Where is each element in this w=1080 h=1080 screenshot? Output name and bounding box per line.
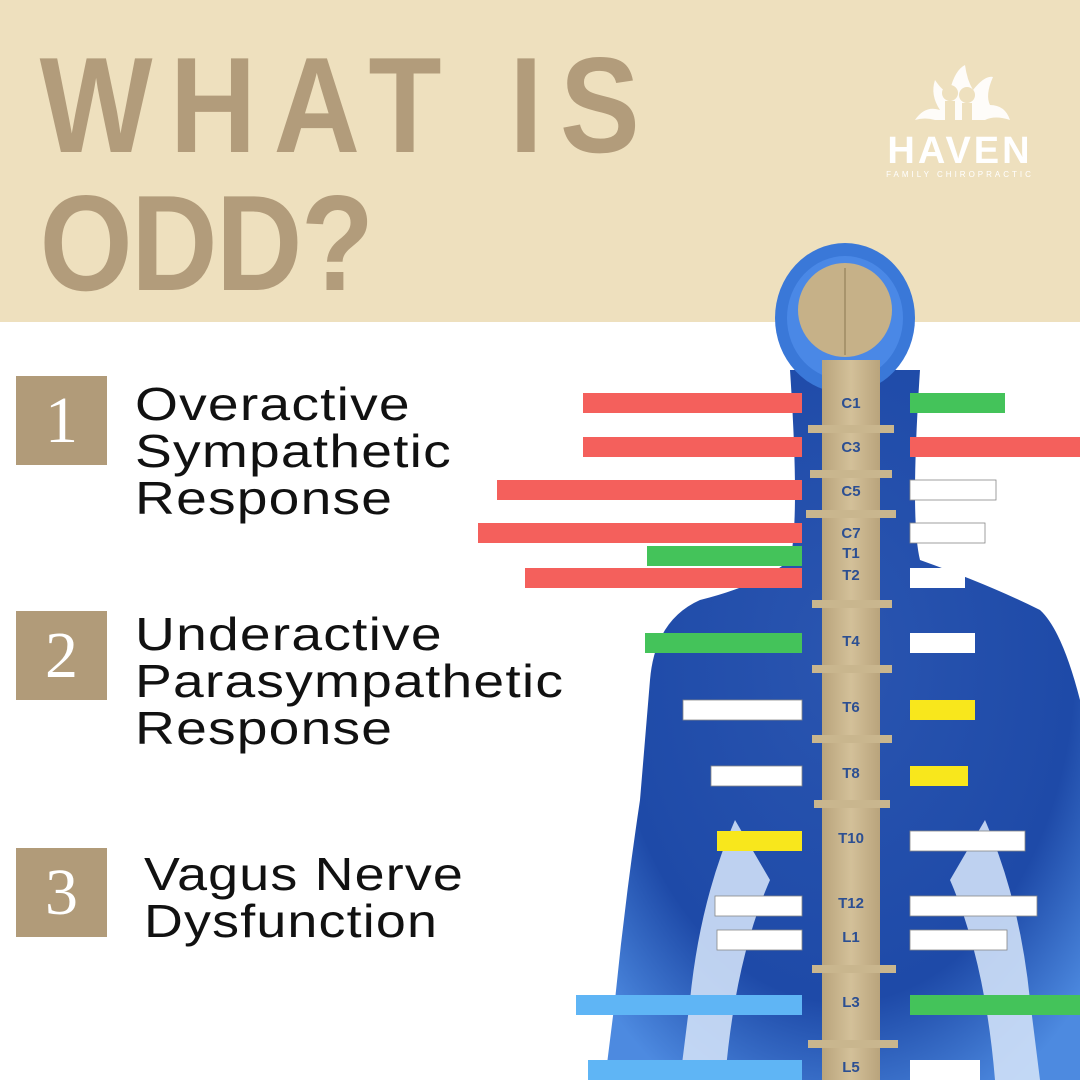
- text 3: Dysfunction: [144, 895, 438, 947]
- body illustration with spine chart: L1: [842, 929, 860, 946]
- body illustration with spine chart: T12: [838, 895, 864, 912]
- body illustration with spine chart: T8: [842, 765, 860, 782]
- text 3: Vagus Nerve: [144, 848, 464, 900]
- spine: [822, 360, 880, 1080]
- text 2: [135, 608, 564, 754]
- body illustration with spine chart: T2: [842, 567, 860, 584]
- header band: [0, 0, 1080, 322]
- item 1: [16, 376, 452, 524]
- body silhouette: [605, 370, 1080, 1080]
- logo: [886, 65, 1034, 179]
- text 3: [144, 848, 464, 947]
- number box 3: 3: [45, 856, 78, 929]
- text 2: Underactive: [135, 608, 443, 660]
- text 1: Response: [135, 472, 393, 524]
- title: WHAT IS: [40, 30, 640, 182]
- number box 3: [16, 848, 107, 937]
- body illustration with spine chart: C1: [841, 395, 861, 412]
- number box 2: [16, 611, 107, 700]
- body illustration with spine chart: T1: [842, 545, 860, 562]
- body illustration with spine chart: C3: [841, 439, 861, 456]
- logo: HAVEN: [887, 130, 1033, 172]
- body illustration with spine chart: T4: [842, 633, 860, 650]
- item 2: [16, 608, 564, 754]
- number box 1: [16, 376, 107, 465]
- text 1: Sympathetic: [135, 425, 452, 477]
- bar chart: left: [478, 393, 802, 1080]
- number box 2: 2: [45, 619, 78, 692]
- brain: [798, 263, 892, 357]
- text 2: Response: [135, 702, 393, 754]
- item 3: [16, 848, 464, 947]
- arm gaps: [680, 820, 770, 1080]
- bar chart: right: [910, 393, 1080, 1080]
- text 2: Parasympathetic: [135, 655, 564, 707]
- text 1: Overactive: [135, 378, 411, 430]
- title: ODD?: [40, 168, 374, 320]
- title: [40, 30, 640, 320]
- body illustration with spine chart: L3: [842, 994, 860, 1011]
- logo: FAMILY CHIROPRACTIC: [886, 170, 1034, 179]
- text 1: [135, 378, 452, 524]
- body illustration with spine chart: C5: [841, 483, 861, 500]
- head: [775, 243, 915, 393]
- body illustration with spine chart: T6: [842, 699, 860, 716]
- body illustration with spine chart: L5: [842, 1059, 860, 1076]
- number box 1: 1: [45, 384, 78, 457]
- body illustration with spine chart: T10: [838, 830, 864, 847]
- body illustration with spine chart: C7: [841, 525, 861, 542]
